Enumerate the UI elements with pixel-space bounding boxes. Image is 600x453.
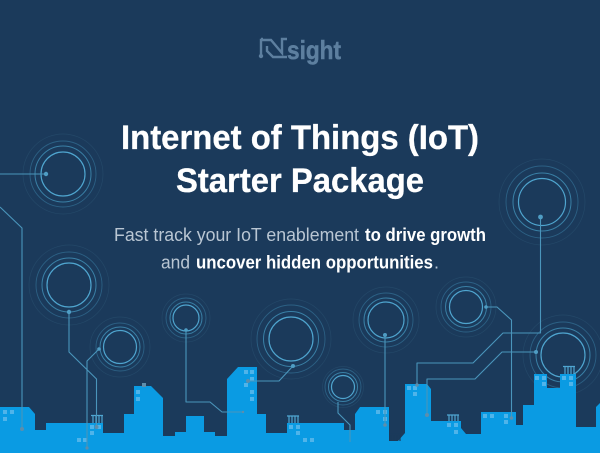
antenna: far right — [563, 366, 575, 374]
rings: small centre left — [162, 294, 210, 342]
circuit connectors — [0, 172, 543, 450]
subtitle: to drive growth — [365, 225, 486, 245]
subtitle: Fast track your IoT enablement — [114, 225, 359, 245]
antenna: centre — [287, 416, 299, 423]
antenna: left — [91, 416, 103, 423]
antenna: mid right — [389, 434, 400, 441]
signal rings — [23, 134, 600, 408]
subtitle: and — [161, 252, 190, 272]
rooftop antennas — [91, 366, 575, 441]
rings: right — [436, 277, 496, 337]
rings: centre — [251, 299, 331, 379]
connector: top right ring — [415, 215, 543, 387]
rings: centre right — [353, 287, 419, 353]
rings: tiny centre — [322, 366, 364, 408]
connector: top left ring — [0, 172, 48, 176]
subtitle: uncover hidden opportunities — [196, 252, 433, 272]
rings: lower left — [90, 317, 150, 377]
connector: mid left ring — [67, 310, 98, 429]
connector: lower right ring — [425, 350, 538, 417]
title — [121, 119, 479, 200]
title: Internet of Things (IoT) — [121, 119, 479, 157]
connector: right ring — [484, 305, 513, 420]
connector: centre right ring — [383, 333, 387, 427]
rings: top left — [23, 134, 103, 214]
rings: lower right — [523, 315, 600, 395]
connector: tiny ring — [338, 402, 350, 442]
title: Starter Package — [176, 162, 424, 200]
antenna: right — [447, 415, 459, 421]
connector: centre ring — [246, 364, 295, 383]
connector: left edge to building — [0, 207, 24, 431]
subtitle: . — [434, 252, 439, 272]
rings: top right — [499, 159, 585, 245]
rings: mid left — [29, 245, 109, 325]
city skyline — [0, 367, 600, 453]
building windows — [3, 370, 573, 442]
subtitle — [114, 225, 486, 272]
logo: Nsight: sight — [287, 35, 341, 65]
logo: Nsight — [259, 35, 341, 65]
connector: small ring to tower — [184, 328, 244, 413]
connector: lower left ring — [85, 347, 101, 450]
